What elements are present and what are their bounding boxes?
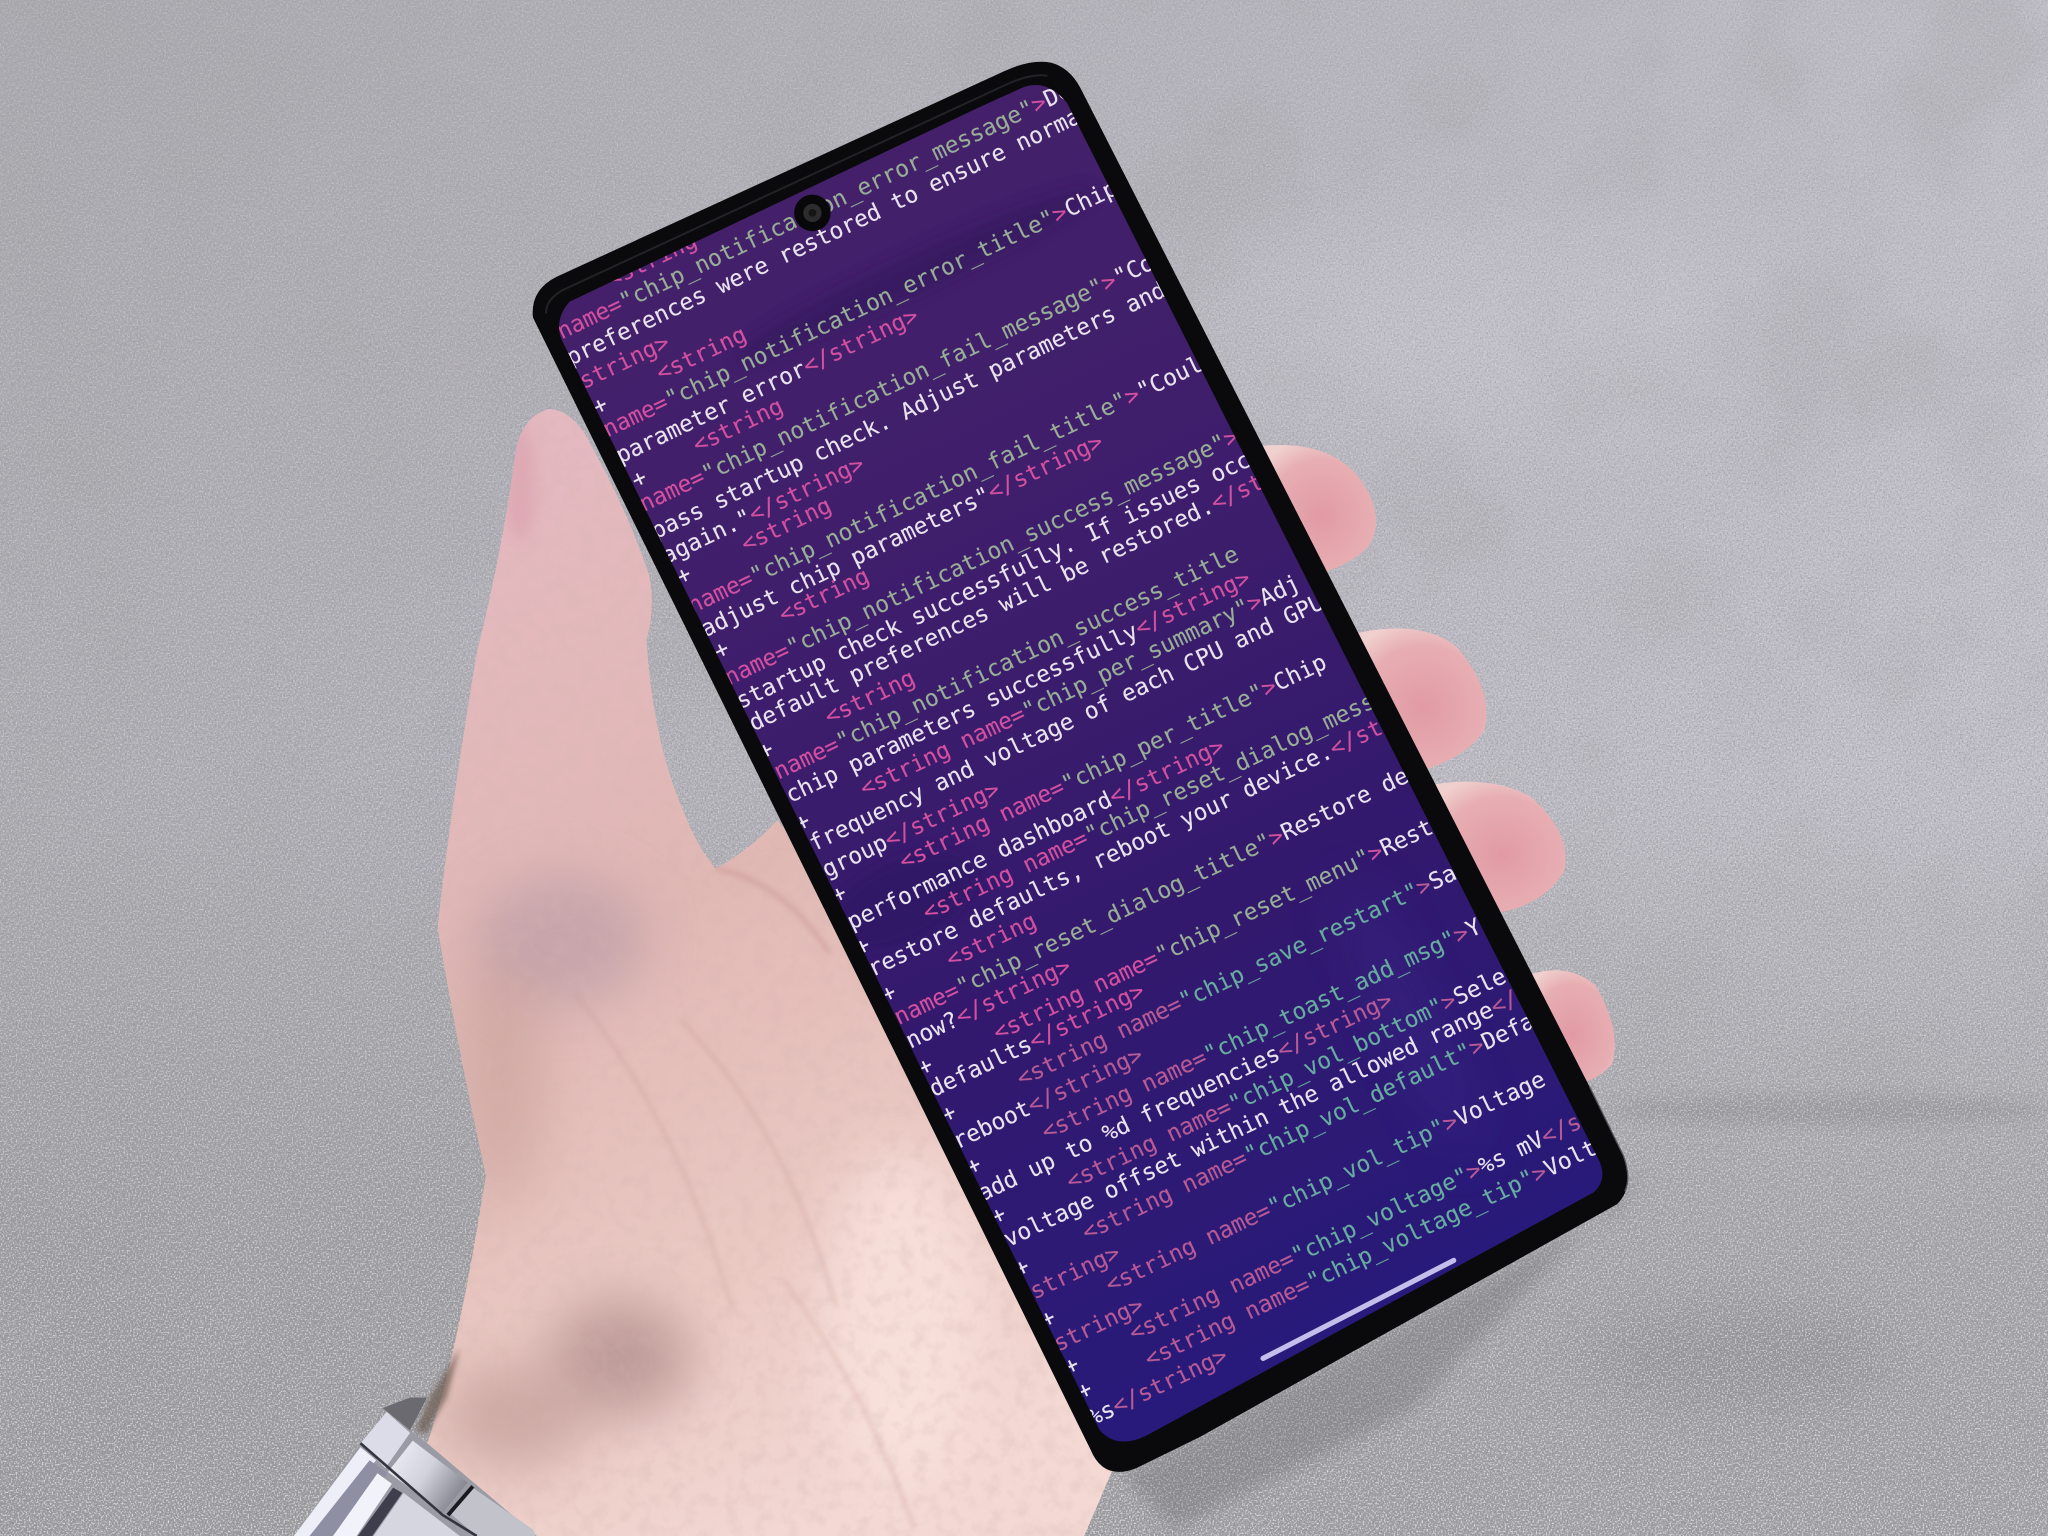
screen code text: default preferences will be restored.</st (745, 469, 1268, 737)
screen code text: + (937, 1099, 961, 1129)
screen code text: + (1060, 1351, 1083, 1381)
screen code text: performance dashboard</string> (843, 733, 1229, 935)
screen code text: <string (652, 322, 751, 387)
screen code text: + (851, 932, 875, 961)
screen code text: name="chip_notification_error_message">De (553, 77, 1076, 345)
screen code text: + (827, 880, 851, 909)
screen code text: + (791, 808, 814, 837)
screen code text: + (672, 561, 696, 591)
hand: thumb and palm (427, 405, 1176, 1536)
screen code text: <string name="chip_voltage_tip">Volt (1141, 1135, 1601, 1373)
screen code text: <string name="chip_per_summary">Adj (856, 570, 1304, 802)
screen code text: + (1010, 1253, 1034, 1283)
screen code text: <string name="chip_reset_dialog_mess (919, 688, 1379, 926)
screen code text: defaults</string> (925, 978, 1149, 1103)
screen code text: name="chip_notification_success_title (770, 541, 1243, 785)
screen code text: string> (1049, 1292, 1148, 1357)
screen code text: parameter error</string> (612, 303, 923, 469)
screen code text: <string (737, 493, 836, 558)
screen code text: <string (821, 665, 919, 730)
screen code text: name="chip_notification_success_message"> (720, 424, 1243, 691)
screen code text: <string name="chip_toast_add_msg">You (1038, 902, 1511, 1146)
screen code text: <string name="chip_vol_default">Defa (1078, 1008, 1539, 1246)
screen code text: + (877, 979, 901, 1009)
screen code text: <string (603, 228, 701, 293)
screen code text: name="chip_notification_fail_title">"Coul (684, 352, 1207, 619)
screen code text: pass startup check. Adjust parameters and (647, 277, 1170, 545)
screen code text: + (987, 1201, 1010, 1231)
finger 1 (1254, 445, 1376, 575)
screen code text: name="chip_reset_dialog_title">Restore de (890, 763, 1413, 1031)
screen code text: frequency and voltage of each CPU and GPU (805, 589, 1328, 857)
screen code text: preferences were restored to ensure norma (562, 104, 1085, 371)
finger 2 (1345, 628, 1486, 773)
phone shadow (1123, 1162, 1648, 1528)
screen code text: startup check successfully. If issues occ (732, 447, 1255, 715)
screen code text: + (914, 1052, 937, 1082)
screen code text: <string (775, 563, 874, 628)
screen code text: string> (1026, 1240, 1124, 1305)
screen code text: <string (689, 393, 787, 459)
screen code text: %s</string> (1083, 1343, 1232, 1432)
front camera punch hole (794, 195, 831, 231)
screen code text: + (710, 636, 733, 665)
screen code text: name="chip_notification_error_title">Chip (599, 175, 1122, 443)
screen code text: <string name="chip_per_title">Chip (895, 649, 1331, 875)
screen code text: <string name="chip_vol_tip">Voltage (1102, 1067, 1550, 1298)
screen code text: + (627, 464, 651, 494)
screen code text: + (1073, 1376, 1097, 1406)
screen code text: + (1036, 1304, 1060, 1334)
watch bracelet (294, 1398, 537, 1536)
screen code text: add up to %d frequencies</string> (974, 987, 1397, 1207)
screen code text: name="chip_notification_fail_message">"Co (635, 250, 1158, 517)
screen code text: <string name="chip_voltage">%s mV</s (1125, 1109, 1586, 1347)
screen code text (553, 77, 1601, 1432)
screen code text: group</string> (818, 776, 1004, 883)
screen code text: <string name="chip_vol_bottom">Selec (1062, 957, 1523, 1195)
screen code text: restore defaults, reboot your device.</st (864, 715, 1387, 982)
screen code text: reboot</string> (949, 1042, 1147, 1155)
screen code text: + (588, 391, 612, 421)
screen code text: <string name="chip_reset_menu">Resto (989, 809, 1450, 1046)
screen code text: <string name="chip_save_restart">Save (1013, 848, 1486, 1092)
screen code text: again."</string> (658, 451, 868, 570)
screen code text: string> (575, 329, 674, 395)
phone body (533, 62, 1628, 1472)
screen code text: chip parameters successfully</string> (782, 565, 1255, 809)
wrist hair (415, 1348, 460, 1434)
screen code text: + (754, 736, 778, 766)
screen code text: adjust chip parameters"</string> (697, 429, 1107, 643)
screen code text: now?</string> (902, 953, 1075, 1054)
screen code text: voltage offset within the allowed range</ (1000, 985, 1523, 1253)
home indicator bar (1263, 1260, 1454, 1358)
screen code text: <string (942, 908, 1041, 973)
phone screen (559, 85, 1602, 1442)
finger 4 (1522, 970, 1615, 1087)
screen code text: + (962, 1151, 986, 1181)
finger 3 (1424, 782, 1565, 914)
